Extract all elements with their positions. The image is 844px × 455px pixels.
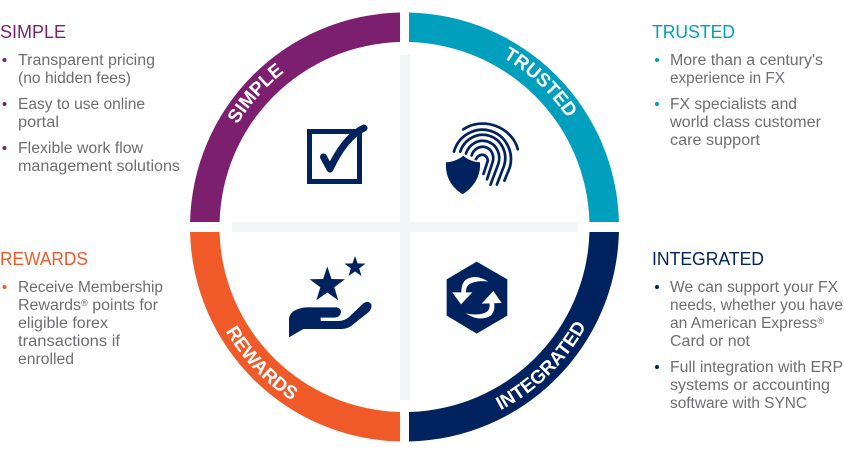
center cross divider <box>232 55 578 400</box>
ring segment: rewards: REWARDS <box>226 325 298 399</box>
bullet list: simple: (no hidden fees) <box>18 70 131 87</box>
heading: rewards: REWARDS <box>0 248 88 269</box>
panel: integrated <box>652 248 843 412</box>
icon: checkbox <box>310 128 364 182</box>
bullet list: integrated: an American Express <box>670 315 816 332</box>
ring segment: integrated <box>409 232 619 442</box>
panel: simple <box>0 21 180 175</box>
bullet list: trusted: More than a century's <box>670 52 823 69</box>
icon: fingerprint shield <box>446 116 523 194</box>
bullet list: simple: management solutions <box>18 158 180 175</box>
heading: integrated: INTEGRATED <box>652 248 764 269</box>
bullet list: rewards: Receive Membership <box>18 279 163 296</box>
bullet list: rewards <box>2 279 163 368</box>
bullet list: integrated: Card or not <box>670 333 751 350</box>
panel: rewards <box>0 248 163 368</box>
bullet list: simple: portal <box>18 114 59 131</box>
bullet list: integrated: software with SYNC <box>670 395 807 412</box>
bullet list: trusted: world class customer <box>669 114 821 131</box>
heading: trusted: TRUSTED <box>652 21 735 42</box>
ring segment: integrated: INTEGRATED <box>495 322 584 410</box>
ring segment: trusted: TRUSTED <box>506 46 576 116</box>
bullet list: rewards: enrolled <box>18 351 74 368</box>
bullet list: trusted: care support <box>670 132 761 149</box>
ring segment: simple: SIMPLE <box>228 62 284 122</box>
bullet list: rewards: points for <box>88 297 158 314</box>
ring segment: rewards <box>190 232 400 442</box>
icon: hexagon with sync arrows <box>447 262 507 334</box>
bullet list: trusted: experience in FX <box>670 70 786 87</box>
bullet list: simple <box>2 52 180 175</box>
bullet list: integrated: needs, whether you have <box>670 297 843 314</box>
bullet list: rewards: ® <box>81 298 88 308</box>
bullet list: trusted: FX specialists and <box>670 96 797 113</box>
bullet list: simple: Transparent pricing <box>18 52 155 69</box>
bullet list: integrated: We can support your FX <box>670 279 839 296</box>
bullet list: rewards: transactions if <box>18 333 121 350</box>
panel: trusted <box>652 21 823 149</box>
bullet list: trusted <box>655 52 823 149</box>
bullet list: integrated: systems or accounting <box>670 377 830 394</box>
bullet list: integrated <box>655 279 843 412</box>
heading: simple: SIMPLE <box>0 21 66 42</box>
ring segment: simple <box>190 12 400 222</box>
bullet list: integrated: ® <box>817 316 824 326</box>
bullet list: rewards: eligible forex <box>18 315 108 332</box>
bullet list: rewards: Rewards <box>18 297 79 314</box>
bullet list: simple: Flexible work flow <box>18 140 144 157</box>
ring segment: trusted <box>409 12 619 222</box>
icon: hand with stars <box>289 256 372 337</box>
bullet list: integrated: Full integration with ERP <box>670 359 843 376</box>
bullet list: simple: Easy to use online <box>18 96 145 113</box>
